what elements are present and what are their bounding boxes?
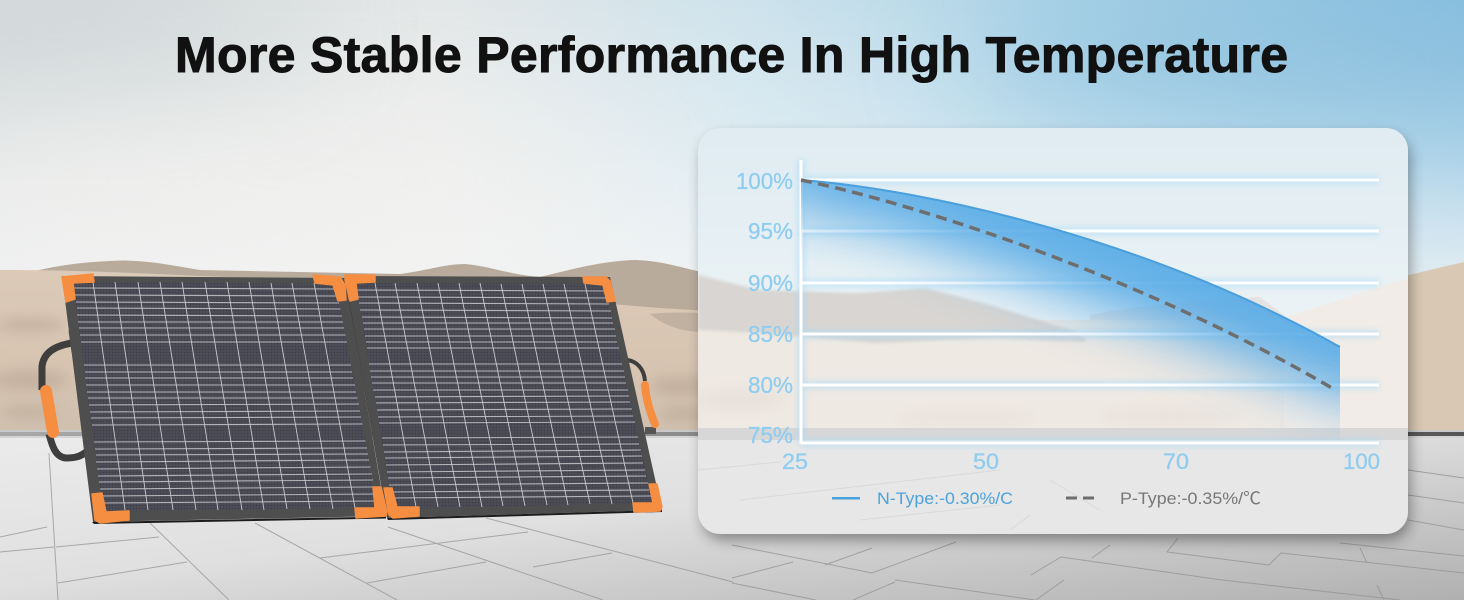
solar panel: left <box>62 276 386 524</box>
N-type area under curve <box>801 182 1340 437</box>
legend: N-type: N-Type:-0.30%/C <box>877 489 1013 508</box>
solar panel: right handle <box>627 360 656 434</box>
P-type dashed curve <box>801 180 1332 388</box>
background: paved floor <box>0 434 1464 600</box>
N-type curve <box>801 180 1340 432</box>
y-axis labels: 95% <box>748 218 793 244</box>
title: More Stable Performance In High Temperature <box>175 27 1288 83</box>
x-axis labels: 50 <box>973 449 999 474</box>
x-axis labels: 100 <box>1343 449 1380 474</box>
solar panel: right <box>345 276 662 520</box>
x-axis labels: 25 <box>782 449 808 474</box>
left panel cell grid <box>74 282 377 510</box>
solar panel: hinge gap <box>350 300 388 516</box>
y-axis labels <box>736 168 793 448</box>
y-axis labels: 80% <box>748 372 793 398</box>
chart card <box>695 128 1420 534</box>
solar panel: orange corner guards <box>62 274 662 523</box>
x-axis labels <box>782 449 1380 474</box>
y-axis labels: 85% <box>748 321 793 347</box>
background: desert dunes <box>0 260 1464 440</box>
grid lines and axis <box>801 160 1379 444</box>
solar panel: left handle <box>42 330 96 463</box>
y-axis labels: 75% <box>748 422 793 448</box>
right panel cell grid <box>357 283 651 507</box>
y-axis labels: 90% <box>748 270 793 296</box>
background: sky <box>0 0 1464 300</box>
legend: P-type: P-Type:-0.35%/℃ <box>1120 489 1261 508</box>
x-axis labels: 70 <box>1163 449 1189 474</box>
card shadow <box>702 136 1410 540</box>
y-axis labels: 100% <box>736 168 793 194</box>
card backdrop: sky, dunes and floor seen through the glass <box>695 128 1408 534</box>
background: horizon rail <box>0 430 1464 438</box>
